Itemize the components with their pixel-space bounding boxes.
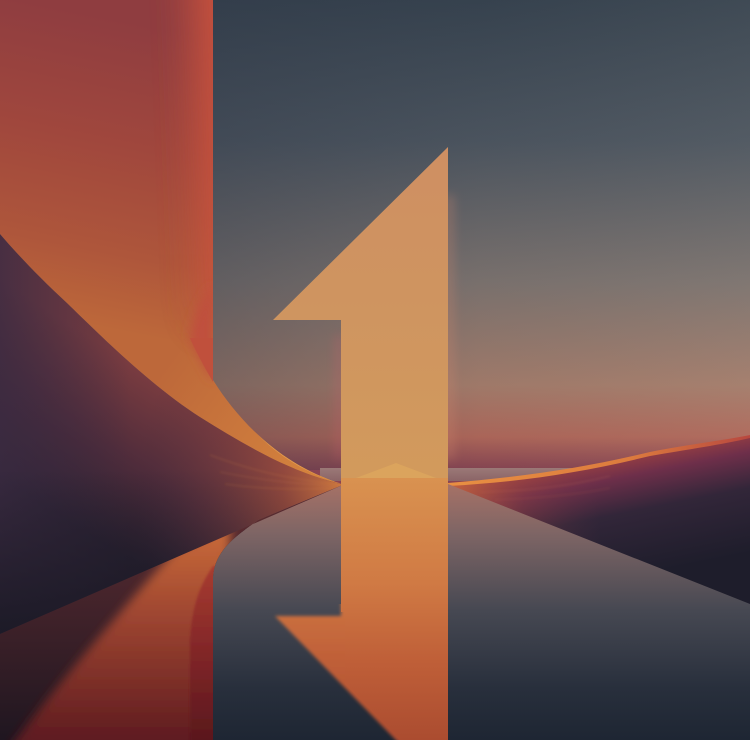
panel: red wall sweeping into orange curve xyxy=(0,0,345,490)
panel: dark right dune xyxy=(448,435,750,740)
panel: dusk sky background xyxy=(0,0,750,490)
icon: reflected number one xyxy=(274,478,448,740)
dune streaks xyxy=(480,476,610,500)
icon: large number one xyxy=(273,147,454,478)
panel: floor reflection of curved wall xyxy=(0,480,345,740)
dune streaks xyxy=(212,456,236,486)
sweep highlight xyxy=(259,436,338,483)
panel: glass floor xyxy=(213,484,750,740)
icon: small peak at base of the one xyxy=(356,463,436,478)
panel: dark left dune xyxy=(0,234,341,586)
panel: distant sea horizon xyxy=(320,468,605,481)
wall: red crease on right xyxy=(174,0,213,295)
